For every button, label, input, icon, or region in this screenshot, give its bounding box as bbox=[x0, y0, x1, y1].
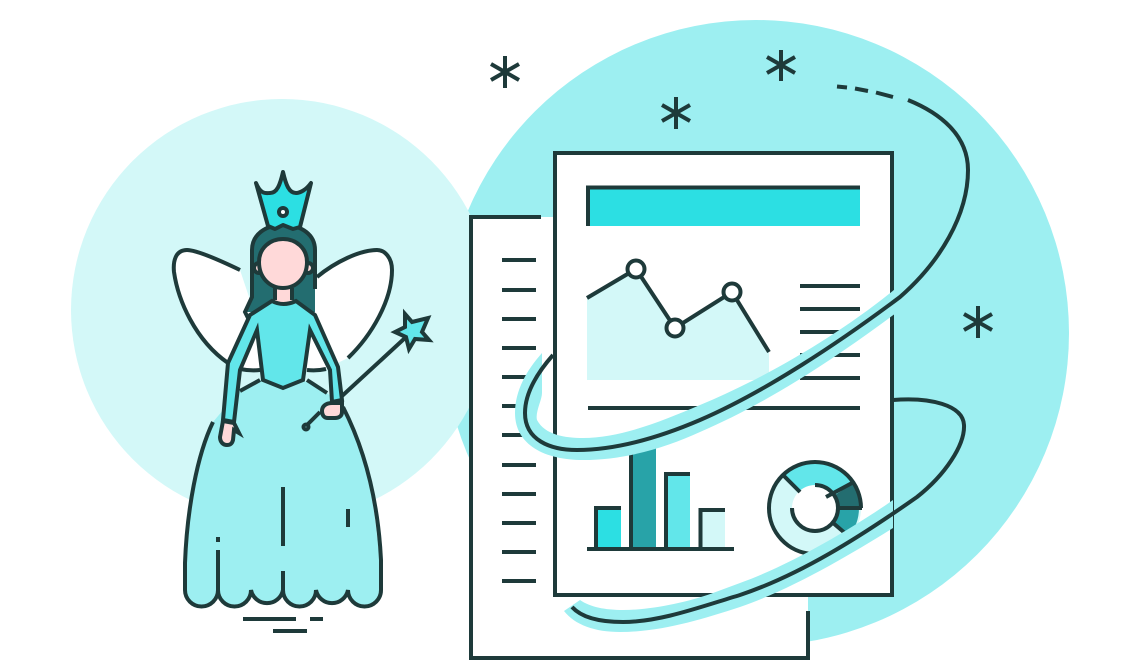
back document text lines bbox=[502, 260, 536, 581]
star bbox=[395, 314, 429, 349]
crown bbox=[256, 172, 311, 229]
skirt bbox=[185, 380, 381, 606]
hand: right bbox=[322, 403, 342, 418]
orbit dashes bbox=[837, 86, 893, 97]
background circle: small bbox=[71, 99, 493, 521]
asterisk bbox=[662, 97, 690, 129]
orbit band: upper bbox=[515, 285, 900, 460]
face bbox=[259, 239, 307, 288]
fairy bbox=[174, 172, 429, 631]
asterisk bbox=[767, 50, 795, 81]
asterisk bbox=[964, 306, 992, 338]
header bar bbox=[587, 186, 860, 226]
neck bbox=[272, 285, 296, 302]
neck sides bbox=[275, 288, 292, 300]
text lines bbox=[588, 286, 860, 408]
orbit band: lower bbox=[564, 500, 893, 632]
asterisk bbox=[491, 56, 519, 88]
orbit line: lower bbox=[572, 399, 964, 622]
orbit line: upper bbox=[525, 100, 968, 450]
ground lines bbox=[243, 619, 323, 631]
main document bbox=[555, 153, 892, 595]
line chart bbox=[587, 260, 769, 380]
bodice and sleeves bbox=[223, 301, 342, 422]
background circle: large bbox=[443, 20, 1069, 646]
wings bbox=[174, 250, 392, 370]
hand: left bbox=[220, 421, 239, 445]
donut chart bbox=[769, 462, 862, 554]
hair bbox=[245, 225, 315, 318]
wand bbox=[304, 314, 429, 430]
ears bbox=[254, 263, 313, 273]
bar chart bbox=[587, 440, 734, 549]
back document bbox=[470, 217, 808, 660]
